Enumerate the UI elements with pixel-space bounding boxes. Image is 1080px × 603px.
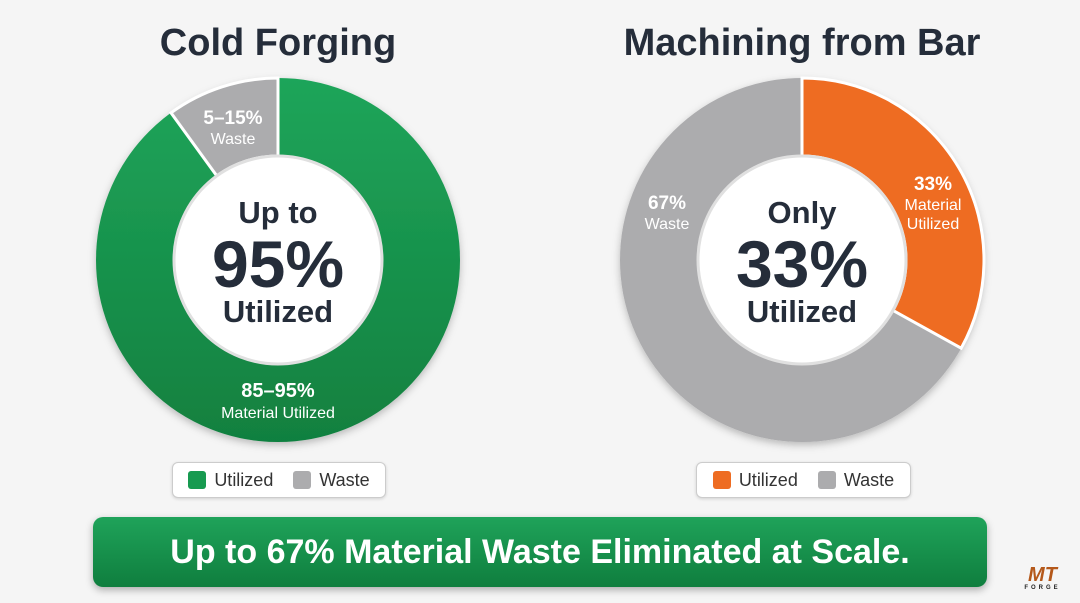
donut: cold forging: Waste (211, 131, 255, 148)
donut: machining: 33% (736, 227, 868, 301)
logo: FORGE (1024, 585, 1061, 591)
legend: right: Waste (844, 470, 894, 490)
donut: machining: Utilized (907, 216, 959, 233)
donut: cold forging (135, 78, 421, 422)
legend: left: Waste (319, 470, 370, 490)
donut: machining: 33% (914, 174, 952, 195)
banner: Up to 67% Material Waste Eliminated at Scale. (170, 532, 910, 570)
donut: machining: 67% (648, 193, 686, 214)
legend: right (696, 462, 911, 498)
donut: machining: Utilized (747, 294, 857, 329)
donut: cold forging: Material Utilized (221, 405, 335, 422)
legend: right: Utilized (739, 470, 798, 490)
donut: machining: Waste (645, 216, 689, 233)
banner (93, 517, 987, 587)
donut: cold forging: Up to (238, 195, 318, 230)
donut: cold forging: 95% (212, 227, 344, 301)
title: cold forging: Cold Forging (160, 22, 396, 64)
logo (1024, 564, 1061, 591)
donut: cold forging: 5–15% (203, 108, 263, 129)
donut: cold forging: 85–95% (241, 380, 315, 402)
logo: MT (1028, 564, 1057, 586)
title: machining from bar: Machining from Bar (624, 22, 980, 64)
donut: machining (645, 78, 984, 403)
donut: machining: Material (905, 197, 961, 214)
legend: left: Utilized (214, 470, 273, 490)
donut: machining: Only (768, 195, 837, 230)
donut: cold forging: Utilized (223, 294, 333, 329)
legend: left (172, 462, 386, 498)
